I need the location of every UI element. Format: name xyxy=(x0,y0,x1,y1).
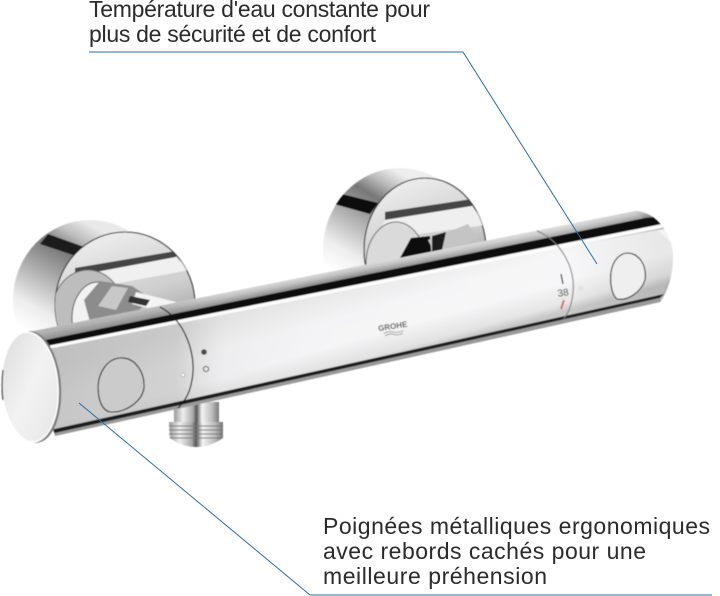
right push button xyxy=(611,253,645,299)
callout text: handles xyxy=(323,513,710,589)
indicator dots xyxy=(181,286,583,377)
left end cap xyxy=(0,329,65,445)
temperature scale: 38 xyxy=(557,287,570,300)
callout text: handles: avec rebords cachés pour une xyxy=(323,538,646,564)
nozzle outlet xyxy=(169,402,223,447)
callout text: temperature xyxy=(89,0,430,47)
callout text: handles: meilleure préhension xyxy=(323,563,547,589)
left wall flange xyxy=(13,220,196,328)
right wall flange xyxy=(324,168,487,267)
callout line: temperature xyxy=(89,52,597,264)
GROHE logo: GROHE xyxy=(378,320,409,333)
callout text: temperature: plus de sécurité et de confort xyxy=(89,21,377,47)
icon: shower mixer product image xyxy=(0,168,700,447)
callout line: handles xyxy=(79,403,712,595)
left collar seam xyxy=(160,307,193,408)
thermostat bar body xyxy=(28,211,700,440)
temperature scale xyxy=(557,274,570,309)
callout text: handles: Poignées métalliques ergonomiques xyxy=(323,513,710,539)
left push button xyxy=(98,358,144,412)
right collar seam xyxy=(537,231,573,320)
